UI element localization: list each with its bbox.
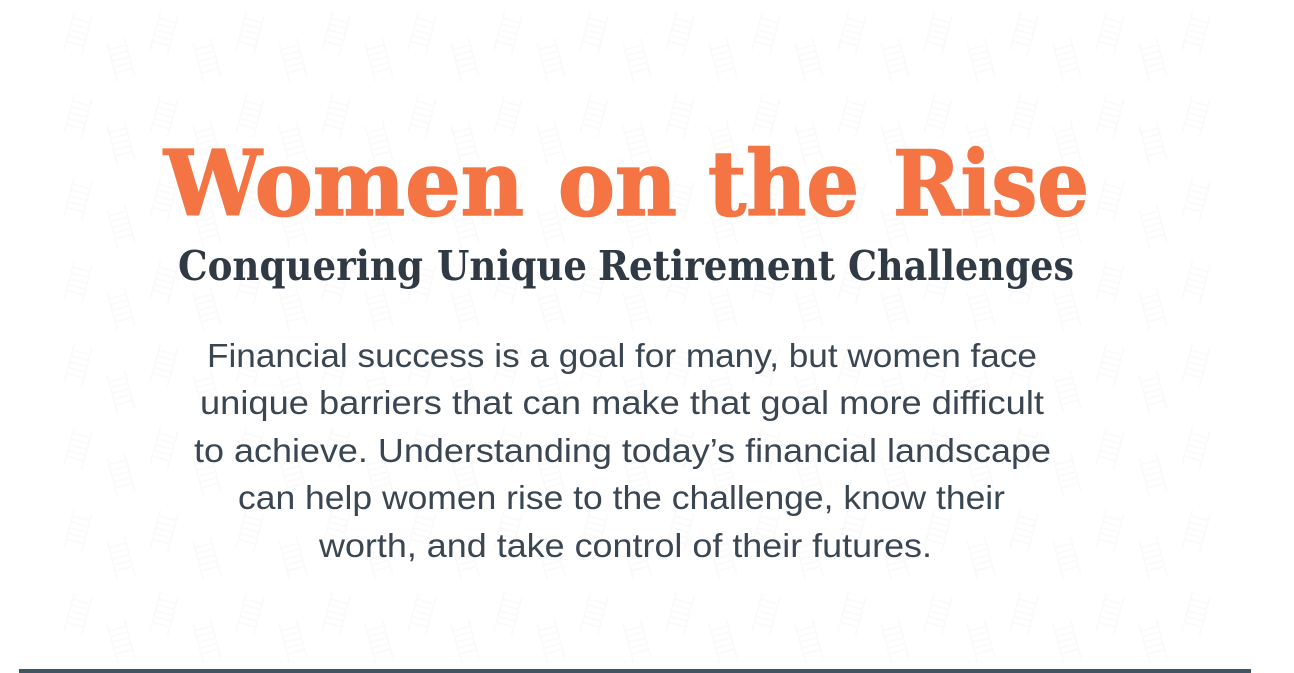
title: the [708, 131, 859, 237]
title: Rise [893, 131, 1089, 237]
title: on [558, 131, 677, 237]
subtitle [178, 242, 1074, 290]
title [163, 131, 1089, 237]
intro paragraph: unique barriers that can make that goal more difficult [200, 384, 1044, 421]
title: Women [163, 131, 524, 237]
intro paragraph [194, 337, 1051, 564]
intro paragraph: Financial success is a goal for many, but women face [207, 337, 1037, 374]
subtitle: Unique [437, 242, 587, 290]
intro paragraph: can help women rise to the challenge, know their [238, 479, 1005, 516]
intro paragraph: worth, and take control of their futures. [318, 527, 932, 564]
subtitle: Challenges [848, 242, 1074, 290]
subtitle: Retirement [598, 242, 835, 290]
subtitle: Conquering [178, 242, 423, 290]
intro paragraph: to achieve. Understanding today’s financial landscape [194, 432, 1051, 469]
bottom rule [19, 669, 1251, 673]
